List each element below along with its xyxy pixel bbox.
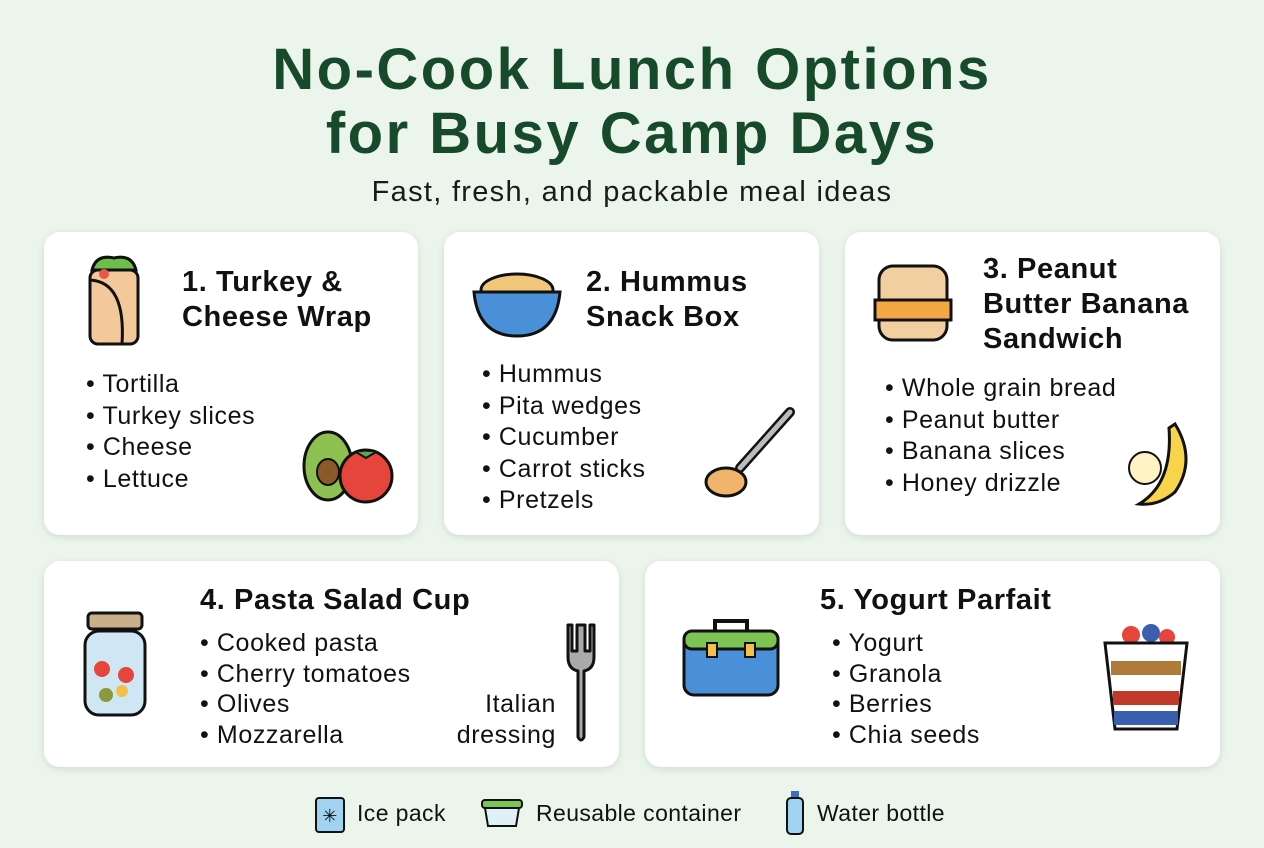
list: Cooked pasta	[217, 629, 378, 657]
icon: bowl	[472, 272, 562, 338]
list	[87, 370, 255, 492]
heading	[586, 266, 748, 333]
text: italian dressing: Italian	[485, 690, 556, 718]
title: for Busy Camp Days	[326, 101, 938, 166]
list: Yogurt	[848, 629, 923, 657]
list: Cucumber	[499, 423, 619, 451]
icon: banana	[1128, 422, 1188, 506]
icon: water bottle	[786, 791, 804, 835]
heading: Sandwich	[983, 323, 1123, 355]
text: italian dressing	[457, 690, 556, 748]
list	[833, 629, 980, 748]
list: Pretzels	[499, 486, 594, 514]
panel: hummus	[444, 232, 819, 535]
icon: sandwich	[874, 264, 952, 342]
heading: Butter Banana	[983, 288, 1189, 320]
list: Cheese	[103, 433, 193, 461]
icon: lunchbox	[682, 619, 780, 696]
list: Lettuce	[103, 464, 189, 492]
panel: peanut butter	[845, 232, 1220, 535]
icon: parfait	[1103, 624, 1189, 730]
list	[201, 629, 411, 748]
panel: pasta salad	[44, 561, 619, 767]
heading	[182, 266, 372, 333]
icon: fork	[566, 624, 596, 742]
list	[886, 374, 1116, 496]
heading: 4. Pasta Salad Cup	[200, 584, 470, 616]
list: Banana slices	[902, 437, 1065, 465]
list: Granola	[849, 660, 942, 688]
list: Hummus	[499, 360, 603, 388]
list: Carrot sticks	[499, 454, 646, 482]
list: Berries	[849, 690, 932, 718]
title: No-Cook Lunch Options	[272, 37, 992, 102]
title	[272, 37, 992, 166]
icon: ice pack: ✳	[322, 806, 338, 826]
icon: ice pack	[315, 797, 345, 833]
legend text: container: Reusable container	[536, 800, 741, 826]
subtitle: Fast, fresh, and packable meal ideas	[372, 176, 892, 208]
list: Cherry tomatoes	[217, 660, 411, 688]
legend text: ice pack: Ice pack	[357, 800, 446, 826]
icon: jar	[84, 612, 146, 716]
icon: wrap	[88, 256, 140, 346]
list: Tortilla	[102, 370, 180, 398]
heading: Cheese Wrap	[182, 301, 372, 333]
list	[483, 360, 646, 514]
text: italian dressing: dressing	[457, 720, 556, 748]
heading: 2. Hummus	[586, 266, 748, 298]
icon: avocado tomato	[302, 430, 394, 504]
list: Peanut butter	[902, 406, 1060, 434]
list: Turkey slices	[102, 402, 255, 430]
panel: yogurt parfait	[645, 561, 1220, 767]
legend text: water bottle: Water bottle	[817, 800, 945, 826]
list: Honey drizzle	[902, 468, 1061, 496]
list: Olives	[217, 690, 290, 718]
list: Whole grain bread	[902, 374, 1116, 402]
heading: 1. Turkey &	[182, 266, 343, 298]
list: Pita wedges	[499, 392, 642, 420]
heading	[983, 253, 1189, 355]
list: Chia seeds	[849, 720, 980, 748]
panel: turkey wrap	[44, 232, 418, 535]
heading: 5. Yogurt Parfait	[820, 584, 1052, 616]
list: Mozzarella	[217, 720, 344, 748]
heading: Snack Box	[586, 301, 740, 333]
icon: container	[481, 799, 523, 827]
heading: 3. Peanut	[983, 253, 1117, 285]
icon: spoon	[704, 407, 795, 498]
legend	[315, 791, 945, 835]
